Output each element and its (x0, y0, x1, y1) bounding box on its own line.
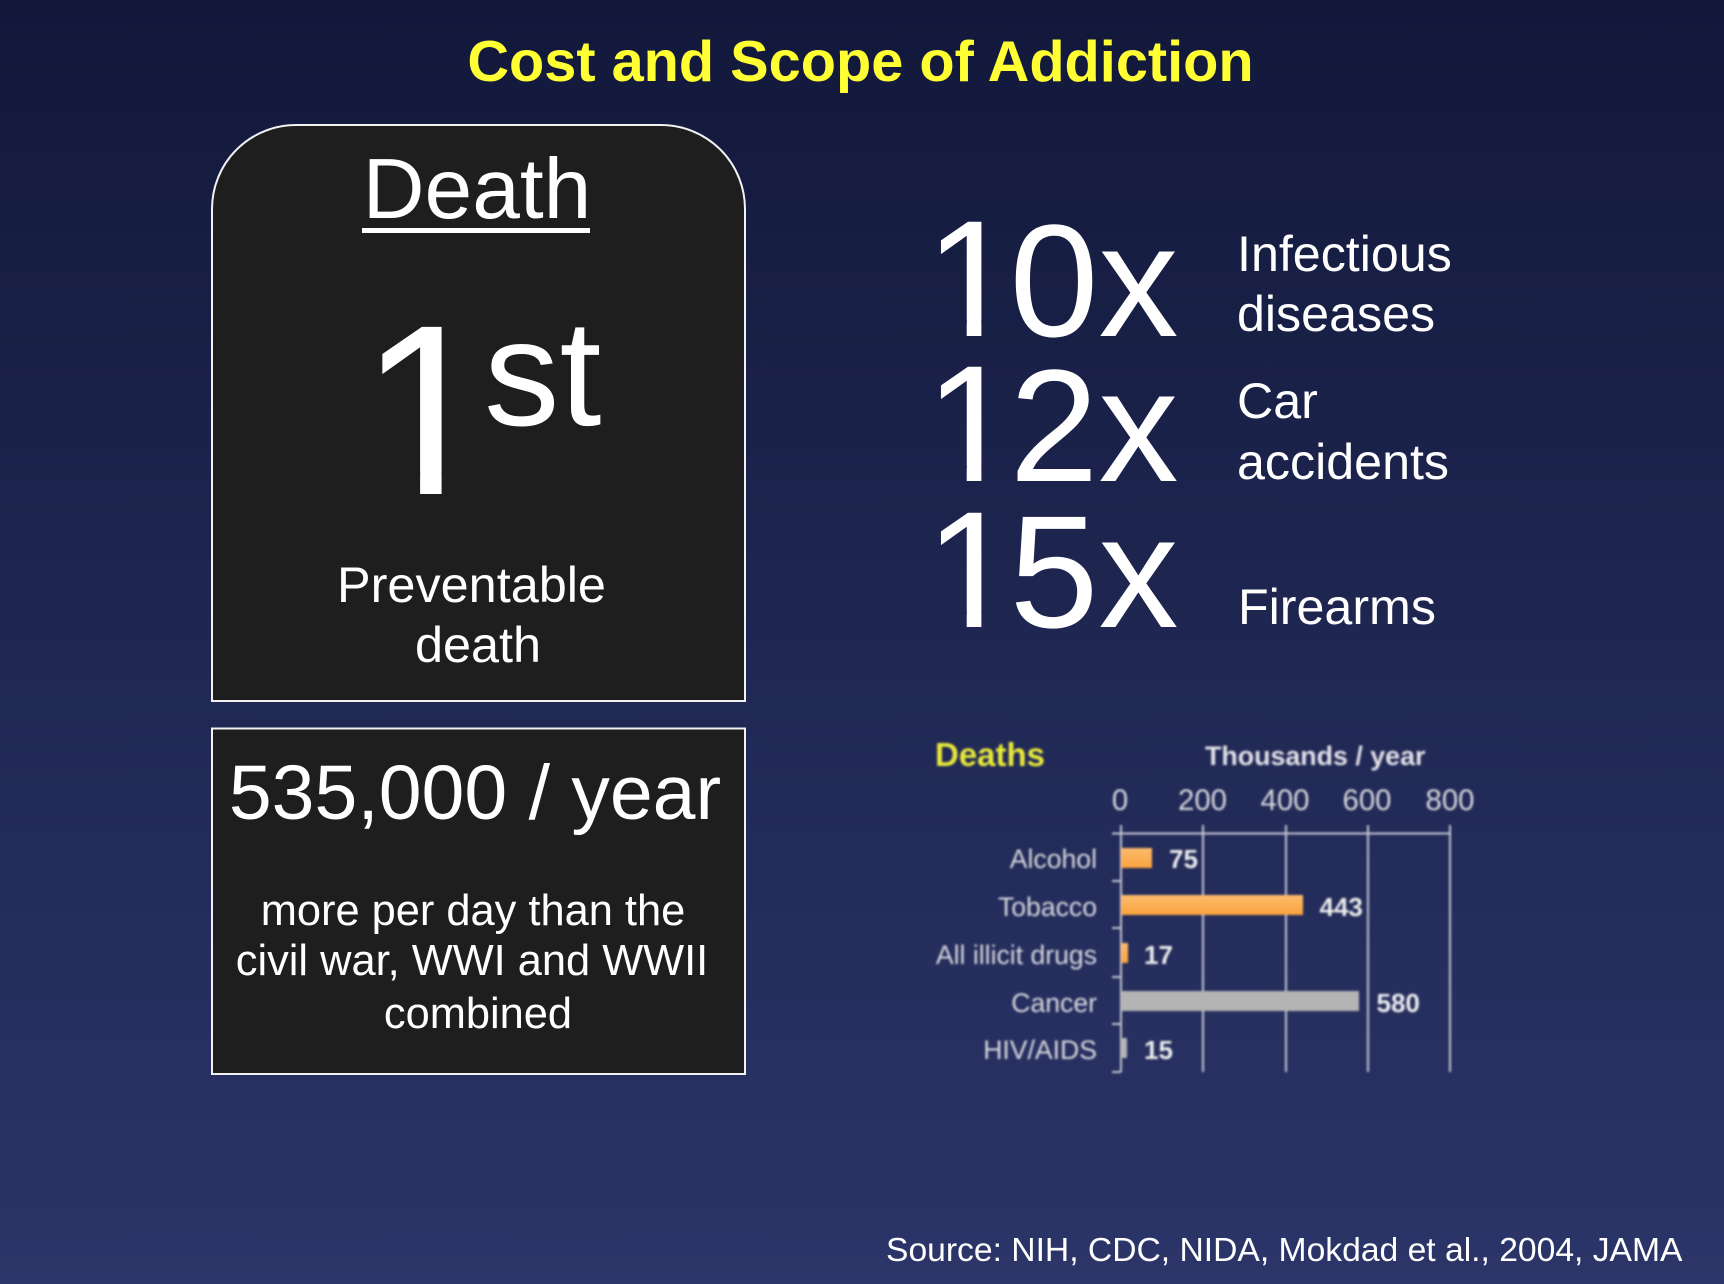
x axis tick labels (1112, 784, 1474, 817)
x axis tick labels: 400 (1261, 784, 1309, 817)
comparison: 15x firearms: 1 (925, 478, 1017, 663)
text: comparison with wars (236, 887, 708, 1038)
text: preventable death (337, 556, 606, 673)
category labels: HIV/AIDS (983, 1035, 1097, 1065)
chart heading: Deaths (935, 736, 1045, 773)
heading: Death: Death (363, 141, 591, 237)
text: preventable death: Preventable (337, 556, 606, 613)
panel background (212, 728, 745, 1074)
category labels: All illicit drugs (936, 940, 1097, 970)
comparison: 10x infectious diseases: Infectious (1237, 226, 1452, 282)
comparison: 15x firearms: Firearms (1238, 579, 1436, 635)
category labels: Tobacco (998, 892, 1097, 922)
comparison: 12x car accidents: 1 (925, 332, 1017, 517)
value labels (1144, 844, 1420, 1065)
x axis tick labels: 600 (1343, 784, 1391, 817)
value labels: 443 (1320, 892, 1363, 922)
comparison: 15x firearms (940, 512, 1434, 629)
comparison: 15x firearms: 5x (1010, 482, 1178, 661)
category labels: Alcohol (1010, 844, 1097, 874)
panel: death ranking (212, 125, 745, 701)
big number: 1st (382, 326, 600, 494)
axis and grid lines (1112, 825, 1450, 1072)
x axis tick labels: 800 (1426, 784, 1474, 817)
text: preventable death: death (415, 616, 541, 673)
title: Cost and Scope of Addiction (467, 30, 1254, 94)
category labels: Cancer (1011, 988, 1097, 1018)
comparison: 12x car accidents: 2x (1010, 336, 1178, 515)
panel background (212, 125, 745, 701)
bar chart: deaths, thousands per year (935, 736, 1474, 1072)
value labels: 580 (1376, 988, 1420, 1018)
value labels: 15 (1144, 1035, 1173, 1065)
statistic: 535,000 per year: 535,000 / year (229, 750, 721, 836)
big number: 1st: 1 (359, 275, 494, 546)
comparison: 10x infectious diseases: diseases (1237, 286, 1435, 342)
text: comparison with wars: civil war, WWI and WWII (236, 937, 708, 985)
big number: 1st: st (484, 288, 601, 457)
axis title: Thousands / year (1205, 741, 1426, 771)
comparison: 10x infectious diseases (940, 222, 1450, 338)
bars (1121, 848, 1359, 1058)
comparison: 12x car accidents: accidents (1237, 434, 1449, 490)
value labels: 75 (1169, 844, 1198, 874)
x axis tick labels: 200 (1178, 784, 1227, 817)
comparison: 12x car accidents (940, 366, 1448, 481)
value labels: 17 (1144, 940, 1173, 970)
comparison: 12x car accidents: Car (1237, 373, 1318, 429)
comparison: 10x infectious diseases: 1 (925, 187, 1017, 372)
category labels (936, 844, 1097, 1065)
text: comparison with wars: more per day than the (261, 887, 685, 935)
text: comparison with wars: combined (384, 990, 572, 1038)
comparison: 10x infectious diseases: 0x (1010, 191, 1178, 370)
panel: deaths per year (212, 728, 745, 1074)
source note: Source: NIH, CDC, NIDA, Mokdad et al., 2004, JAMA (886, 1232, 1683, 1269)
x axis tick labels: 0 (1112, 784, 1128, 817)
